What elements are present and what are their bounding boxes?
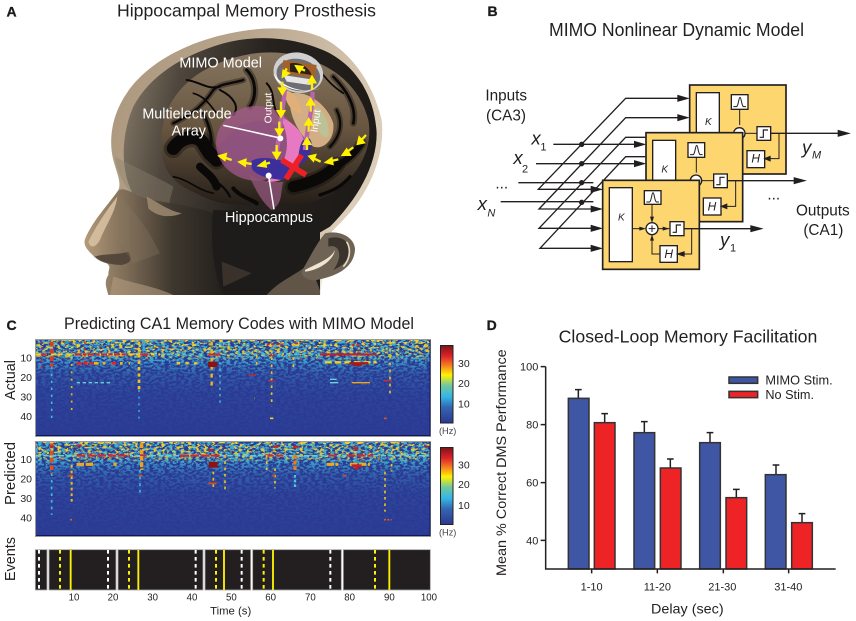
time axis: 30 bbox=[147, 592, 158, 603]
face and jaw bbox=[85, 189, 230, 295]
colour bar: actual: (Hz) bbox=[439, 426, 456, 436]
panel A: hippocampal memory prosthesis bbox=[6, 1, 382, 295]
input and output labels: ... bbox=[495, 176, 508, 193]
input and output labels: Inputs bbox=[485, 88, 527, 105]
heatmap: actual bbox=[36, 340, 430, 436]
axis tick labels: 11-20 bbox=[644, 581, 671, 593]
title D: Closed-Loop Memory Facilitation bbox=[559, 326, 817, 346]
time axis: 40 bbox=[187, 592, 197, 603]
back model box M: H bbox=[751, 152, 760, 166]
hippocampus band, blue bbox=[252, 158, 291, 180]
input and output labels: N bbox=[487, 208, 495, 220]
axis tick labels: 100 bbox=[520, 362, 538, 374]
time axis: 50 bbox=[226, 592, 237, 603]
block diagram bbox=[477, 85, 850, 269]
panel B: MIMO nonlinear dynamic model bbox=[477, 3, 850, 269]
axis tick labels bbox=[520, 362, 802, 593]
axis labels: heatmaps: 20 bbox=[20, 372, 32, 384]
panel label A: A bbox=[6, 4, 17, 20]
image labels bbox=[142, 56, 323, 226]
time axis: 80 bbox=[344, 592, 355, 603]
front model box 1 bbox=[603, 180, 761, 269]
colour bar: predicted: 10 bbox=[458, 500, 470, 512]
red X lesion bbox=[282, 155, 306, 179]
panel D: closed-loop memory facilitation bbox=[487, 317, 836, 616]
input and output labels: y bbox=[718, 229, 731, 250]
heatmap: predicted bbox=[36, 442, 430, 536]
time axis bbox=[69, 592, 437, 618]
back model box M bbox=[690, 85, 848, 174]
axis labels: heatmaps: 10 bbox=[20, 454, 32, 466]
image labels: Multielectrode bbox=[142, 107, 232, 123]
middle model box: H bbox=[708, 199, 717, 213]
axis labels: heatmaps bbox=[3, 352, 32, 581]
input and output labels bbox=[477, 88, 850, 255]
input and output labels: x bbox=[512, 147, 523, 168]
axis labels: heatmaps: Events bbox=[3, 537, 19, 581]
bars: no stim bbox=[594, 423, 812, 569]
axis labels: heatmaps: 40 bbox=[20, 411, 32, 423]
colour bar: actual bbox=[439, 346, 470, 436]
title C: Predicting CA1 Memory Codes with MIMO Model bbox=[64, 314, 414, 333]
axis labels: heatmaps: Actual bbox=[3, 360, 19, 400]
axis labels: heatmaps: 30 bbox=[20, 493, 32, 505]
prosthesis device bbox=[270, 48, 327, 97]
legend: No Stim. bbox=[765, 388, 814, 402]
middle model box bbox=[646, 133, 804, 222]
image labels: Input bbox=[309, 109, 323, 133]
input and output labels: (CA1) bbox=[803, 222, 843, 239]
head outer translucent shell bbox=[85, 28, 382, 295]
panel label B: B bbox=[488, 3, 498, 19]
colour bar: predicted: 20 bbox=[458, 479, 470, 491]
time axis: 90 bbox=[384, 592, 395, 603]
input and output labels: 1 bbox=[730, 243, 736, 255]
image labels: Hippocampus bbox=[225, 210, 313, 226]
colour bar: actual: 30 bbox=[458, 358, 470, 370]
middle model box: K bbox=[661, 165, 669, 176]
time axis: 100 bbox=[421, 592, 437, 603]
bar chart bbox=[493, 349, 836, 616]
input and output labels: Outputs bbox=[796, 203, 850, 220]
axis tick labels: 60 bbox=[526, 478, 538, 490]
brain cortex mass bbox=[161, 52, 369, 205]
input wiring bbox=[501, 96, 687, 251]
leader lines and dots bbox=[223, 125, 283, 209]
front model box 1: K bbox=[618, 213, 626, 224]
back model box M: K bbox=[705, 117, 713, 128]
panel label C: C bbox=[6, 317, 17, 333]
colour bar: predicted: 30 bbox=[458, 460, 470, 472]
panel label D: D bbox=[487, 317, 497, 333]
time axis: Time (s) bbox=[210, 606, 251, 618]
legend bbox=[729, 373, 833, 402]
brain bbox=[161, 52, 369, 205]
axis labels: heatmaps: 10 bbox=[20, 352, 32, 364]
axis tick labels: 31-40 bbox=[774, 581, 802, 593]
pathway tubes bbox=[277, 88, 285, 153]
image labels: Output bbox=[264, 92, 275, 123]
colour bar: predicted: (Hz) bbox=[439, 528, 456, 538]
limbic region, pink bbox=[216, 106, 297, 181]
axes bbox=[541, 367, 836, 573]
axis labels: heatmaps: Predicted bbox=[3, 442, 19, 505]
axis tick labels: 21-30 bbox=[708, 581, 736, 593]
image labels: Array bbox=[172, 124, 207, 140]
front model box 1: H bbox=[664, 247, 673, 261]
time axis: 20 bbox=[108, 592, 118, 603]
dark skull interior bbox=[124, 38, 377, 232]
yellow arrows bbox=[219, 66, 366, 167]
image labels: MIMO Model bbox=[179, 56, 262, 72]
error bars bbox=[575, 390, 805, 523]
time axis: 10 bbox=[69, 592, 79, 603]
axis tick labels: 80 bbox=[526, 420, 538, 432]
axis labels: heatmaps: 30 bbox=[20, 392, 32, 404]
bar chart: Mean % Correct DMS Performance bbox=[493, 349, 509, 576]
bars: MIMO stim bbox=[568, 398, 786, 569]
events raster bbox=[35, 550, 437, 618]
sulci bbox=[173, 67, 362, 203]
input and output labels: x bbox=[477, 193, 488, 214]
axis titles: Delay (sec) bbox=[651, 600, 724, 616]
axis tick labels: 40 bbox=[526, 535, 538, 547]
ear bbox=[302, 232, 355, 280]
input and output labels: M bbox=[812, 150, 822, 162]
time axis: 60 bbox=[265, 592, 276, 603]
input and output labels: x bbox=[530, 128, 541, 149]
colour bar: predicted bbox=[439, 448, 470, 538]
input and output labels: (CA3) bbox=[486, 108, 526, 125]
title A: Hippocampal Memory Prosthesis bbox=[117, 1, 376, 21]
axis tick labels: 1-10 bbox=[581, 581, 603, 593]
legend: MIMO Stim. bbox=[765, 373, 833, 387]
title B: MIMO Nonlinear Dynamic Model bbox=[549, 20, 804, 40]
colour bar: actual: 20 bbox=[458, 378, 470, 390]
input and output labels: 1 bbox=[540, 142, 546, 154]
forehead sheen bbox=[115, 157, 174, 203]
input and output labels: y bbox=[800, 136, 813, 157]
input and output labels: ... bbox=[767, 186, 780, 203]
panel C: predicting CA1 memory codes bbox=[3, 314, 470, 618]
illustration: head with brain bbox=[85, 28, 382, 295]
time axis: 70 bbox=[305, 592, 316, 603]
axis labels: heatmaps: 20 bbox=[20, 474, 32, 486]
input and output labels: 2 bbox=[522, 164, 528, 176]
axis labels: heatmaps: 40 bbox=[20, 512, 32, 524]
colour bar: actual: 10 bbox=[458, 398, 470, 410]
